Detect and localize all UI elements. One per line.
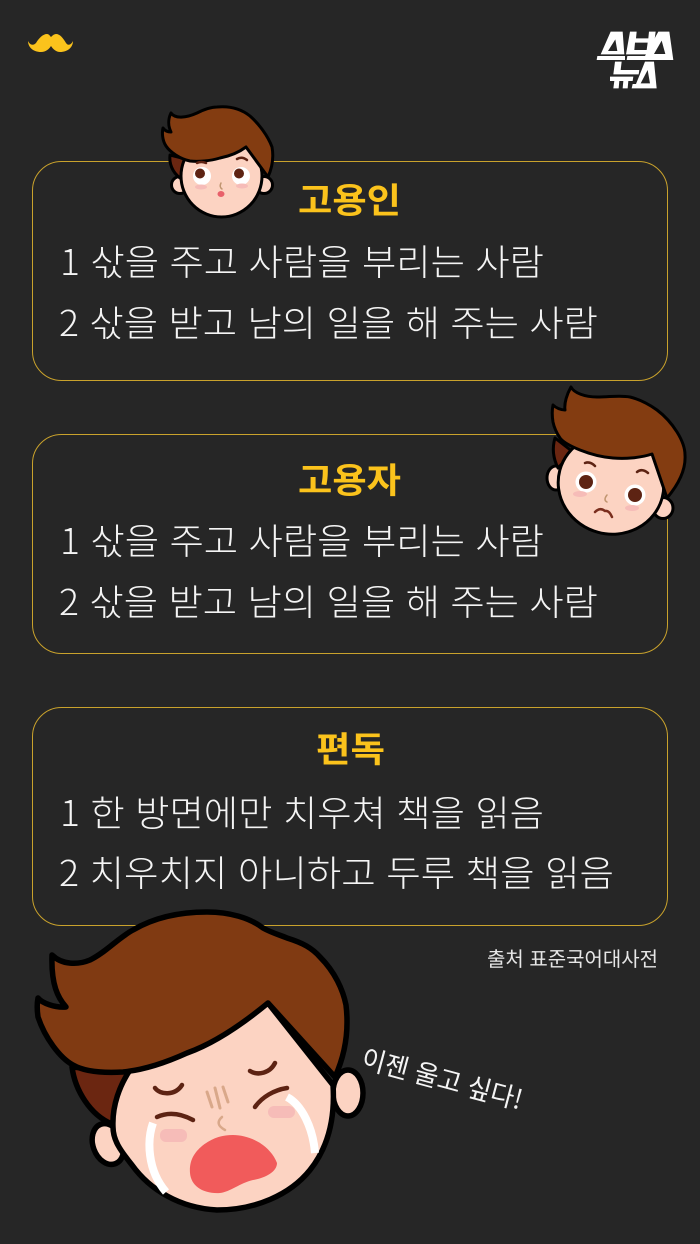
panel: 편독 bbox=[32, 708, 668, 926]
text: definition 2: 2 치우치지 아니하고 두루 책을 읽음 bbox=[59, 845, 614, 897]
icon: surprised boy face bbox=[162, 107, 273, 217]
text: definition 2: 2 삯을 받고 남의 일을 해 주는 사람 bbox=[59, 574, 598, 626]
heading: 고용자: 고용자 bbox=[298, 462, 401, 501]
text: crying speech: 이젠 울고 싶다! bbox=[358, 1037, 527, 1117]
icon: worried boy face bbox=[547, 387, 685, 546]
icon: crying boy face bbox=[37, 912, 363, 1210]
text: definition 1: 1 삯을 주고 사람을 부리는 사람 bbox=[60, 513, 544, 565]
text: definition 1: 1 한 방면에만 치우쳐 책을 읽음 bbox=[60, 785, 544, 837]
icon: mustache logo bbox=[28, 34, 73, 52]
panel: 고용자 bbox=[32, 434, 668, 654]
logo: SBS News bbox=[597, 32, 673, 88]
text: source: 출처 표준국어대사전 bbox=[487, 948, 658, 971]
heading: 편독: 편독 bbox=[316, 731, 385, 770]
text: definition 2: 2 삯을 받고 남의 일을 해 주는 사람 bbox=[59, 295, 598, 347]
text: definition 1: 1 삯을 주고 사람을 부리는 사람 bbox=[60, 234, 544, 286]
panel: 고용인 bbox=[32, 162, 668, 380]
heading: 고용인: 고용인 bbox=[298, 182, 401, 221]
